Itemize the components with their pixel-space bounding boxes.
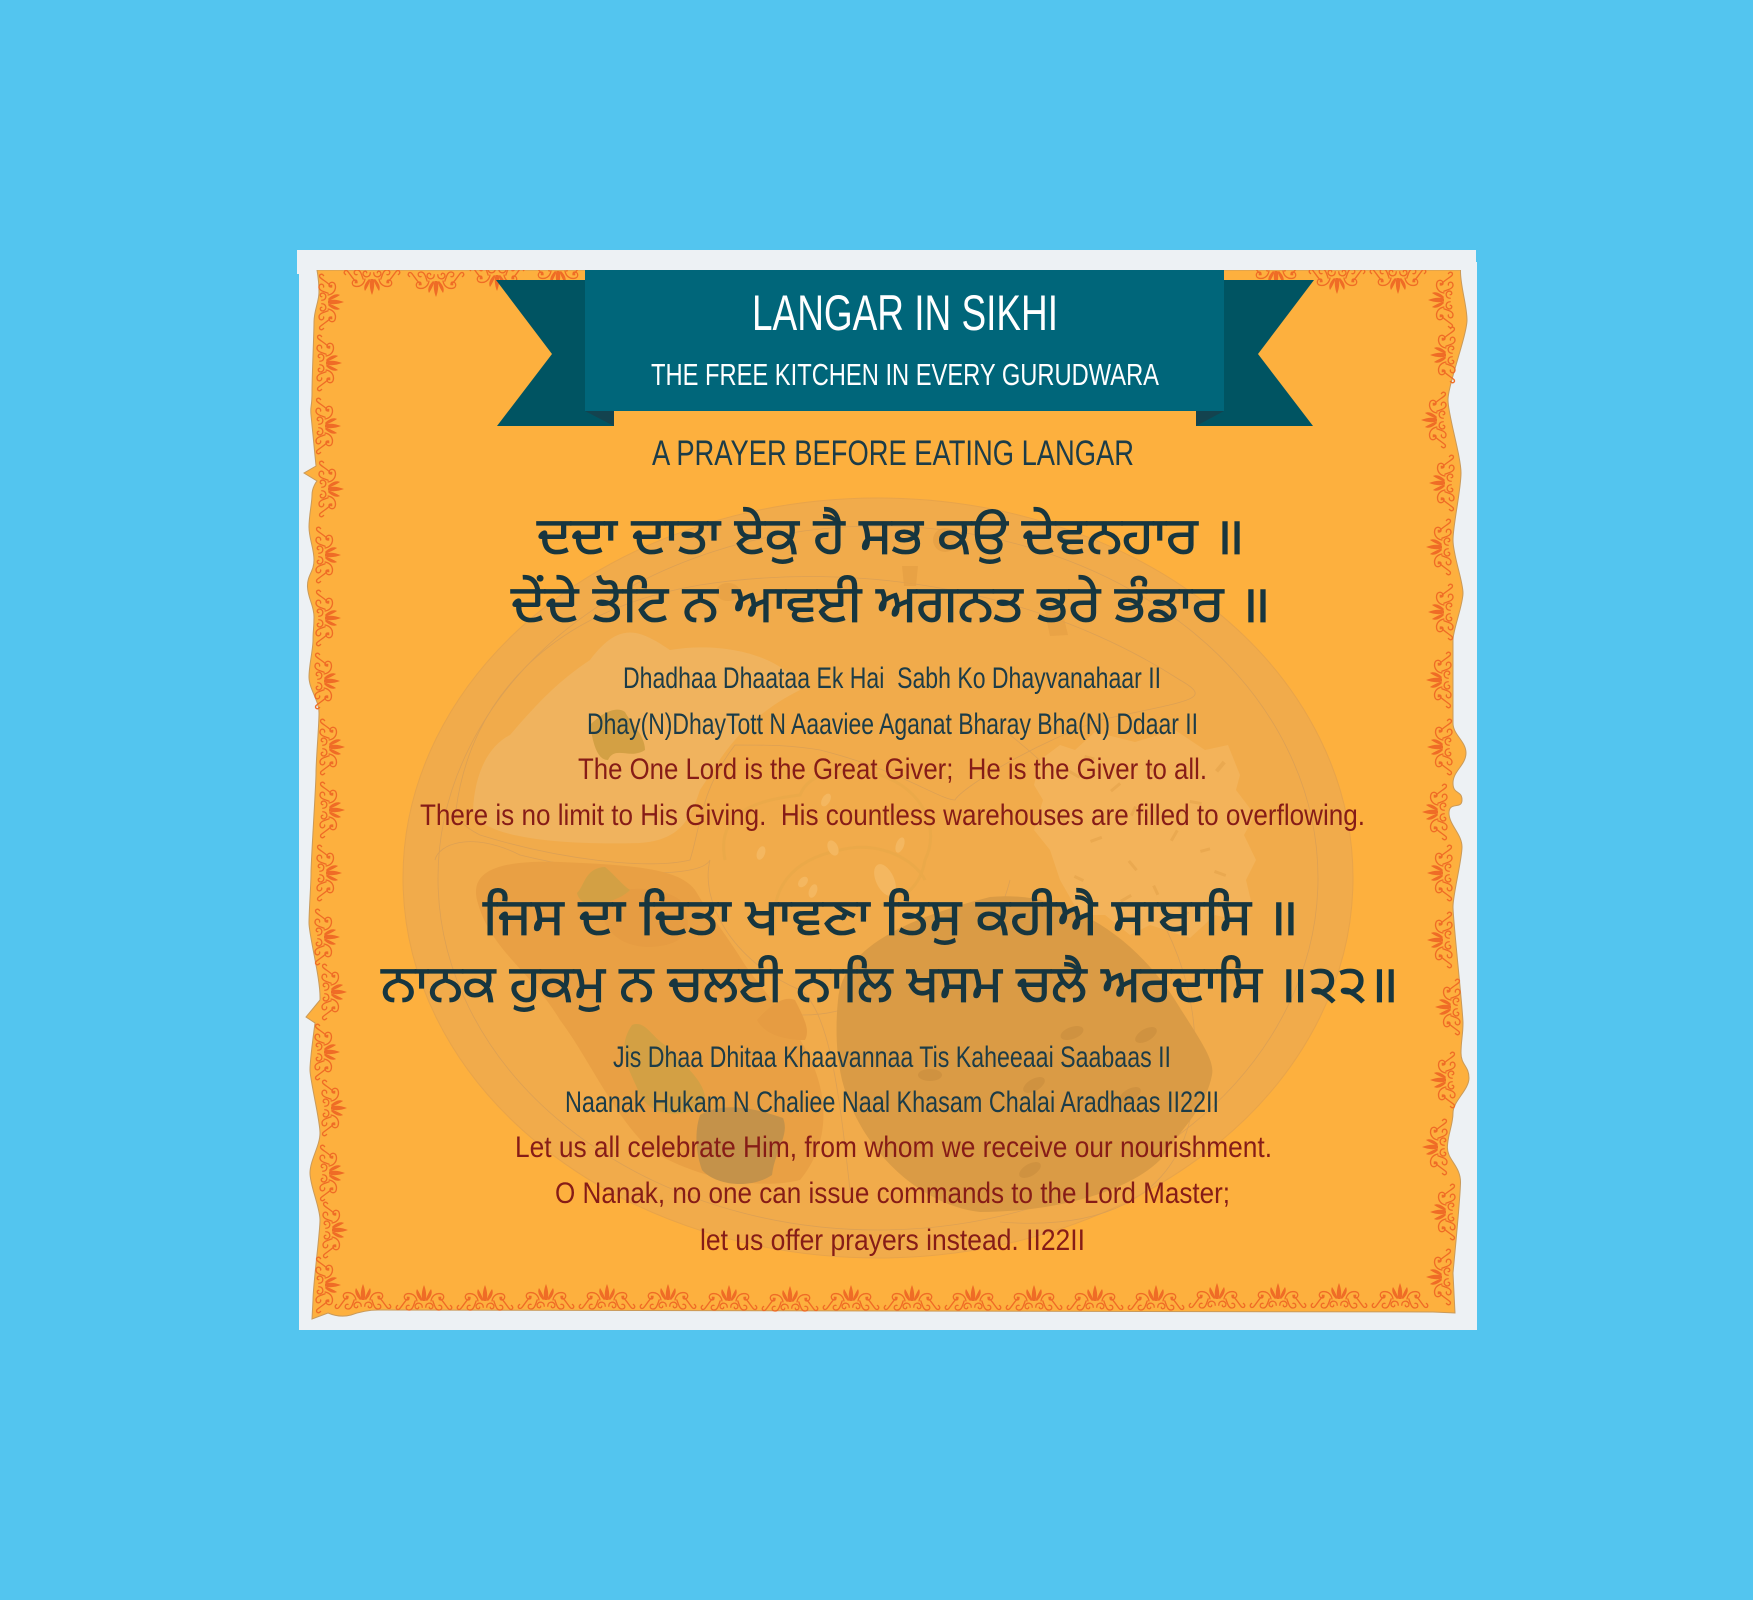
first verse: Gurmukhi: ਦੇਂਦੇ ਤੋਟਿ ਨ ਆਵਈ ਅਗਨਤ ਭਰੇ ਭੰਡਾਰ ॥ (510, 575, 1271, 644)
ornament: bottom border (335, 1283, 1428, 1311)
panel top bar (297, 250, 1476, 270)
ribbon right fold (1196, 411, 1224, 426)
second verse: transliteration: Jis Dhaa Dhitaa Khaavannaa Tis Kaheeaai Saabaas II (613, 1041, 1171, 1074)
first verse: Gurmukhi (510, 507, 1271, 644)
green herb spots (577, 710, 705, 1114)
second verse: Gurmukhi: ਨਾਨਕ ਹੁਕਮੁ ਨ ਚਲਈ ਨਾਲਿ ਖਸਮ ਚਲੈ ਅਰਦਾਸਿ ॥੨੨॥ (380, 955, 1399, 1024)
first verse: translation: There is no limit to His Giving. His countless warehouses are filled to overflowing. (420, 799, 1365, 832)
ornament: top border (344, 262, 1426, 297)
section heading: A PRAYER BEFORE EATING LANGAR (652, 434, 1134, 473)
ribbon right tail (1196, 280, 1314, 426)
subtitle: THE FREE KITCHEN IN EVERY GURUDWARA (651, 357, 1159, 392)
second verse: translation: O Nanak, no one can issue commands to the Lord Master; (555, 1177, 1230, 1210)
ribbon left fold (585, 411, 614, 426)
ornament: left border (315, 274, 348, 1313)
first verse: translation (420, 753, 1365, 832)
ribbon main band (585, 270, 1224, 411)
plate illustration with food (403, 498, 1353, 1258)
title: LANGAR IN SIKHI (752, 285, 1058, 341)
curry darker patches (600, 889, 807, 1040)
dark spice patch (696, 1107, 785, 1184)
rice grains (1058, 755, 1240, 915)
parchment with torn edges (304, 270, 1469, 1319)
second verse: transliteration: Naanak Hukam N Chaliee Naal Khasam Chalai Aradhaas II22II (565, 1086, 1219, 1119)
ribbon left tail (496, 280, 614, 426)
left curry blob (476, 862, 823, 1184)
title ribbon (496, 270, 1314, 426)
second verse: Gurmukhi (380, 888, 1399, 1024)
second verse: translation (515, 1131, 1272, 1257)
first verse: transliteration: Dhadhaa Dhaataa Ek Hai Sabh Ko Dhayvanahaar II (623, 662, 1161, 695)
white paper panel (297, 250, 1477, 1330)
roti light blob (473, 632, 800, 843)
second verse: Gurmukhi: ਜਿਸ ਦਾ ਦਿਤਾ ਖਾਵਣਾ ਤਿਸੁ ਕਹੀਐ ਸਾਬਾਸਿ ॥ (482, 888, 1299, 957)
rice mound (1034, 730, 1256, 938)
first verse: transliteration: Dhay(N)DhayTott N Aaaviee Aganat Bharay Bha(N) Ddaar II (587, 708, 1198, 741)
first verse: Gurmukhi: ਦਦਾ ਦਾਤਾ ਏਕੁ ਹੈ ਸਭ ਕਉ ਦੇਵਨਹਾਰ ॥ (536, 507, 1245, 576)
top garnish marks (716, 528, 1068, 636)
compartment outlines (435, 577, 1195, 1223)
pakora pieces (724, 772, 931, 930)
second verse: translation: let us offer prayers instead. II22II (700, 1224, 1085, 1257)
bread spots on dark curry (918, 1023, 1159, 1181)
second verse: translation: Let us all celebrate Him, from whom we receive our nourishment. (515, 1131, 1272, 1164)
second verse: transliteration (565, 1041, 1219, 1119)
ornament: right border (1421, 272, 1460, 1305)
plate inner ring (438, 526, 1318, 1230)
first verse: translation: The One Lord is the Great Giver; He is the Giver to all. (578, 753, 1207, 786)
plate disc (403, 498, 1353, 1258)
large dark curry blob (837, 896, 1212, 1212)
first verse: transliteration (587, 662, 1198, 741)
pakora sesame highlights (755, 792, 906, 899)
